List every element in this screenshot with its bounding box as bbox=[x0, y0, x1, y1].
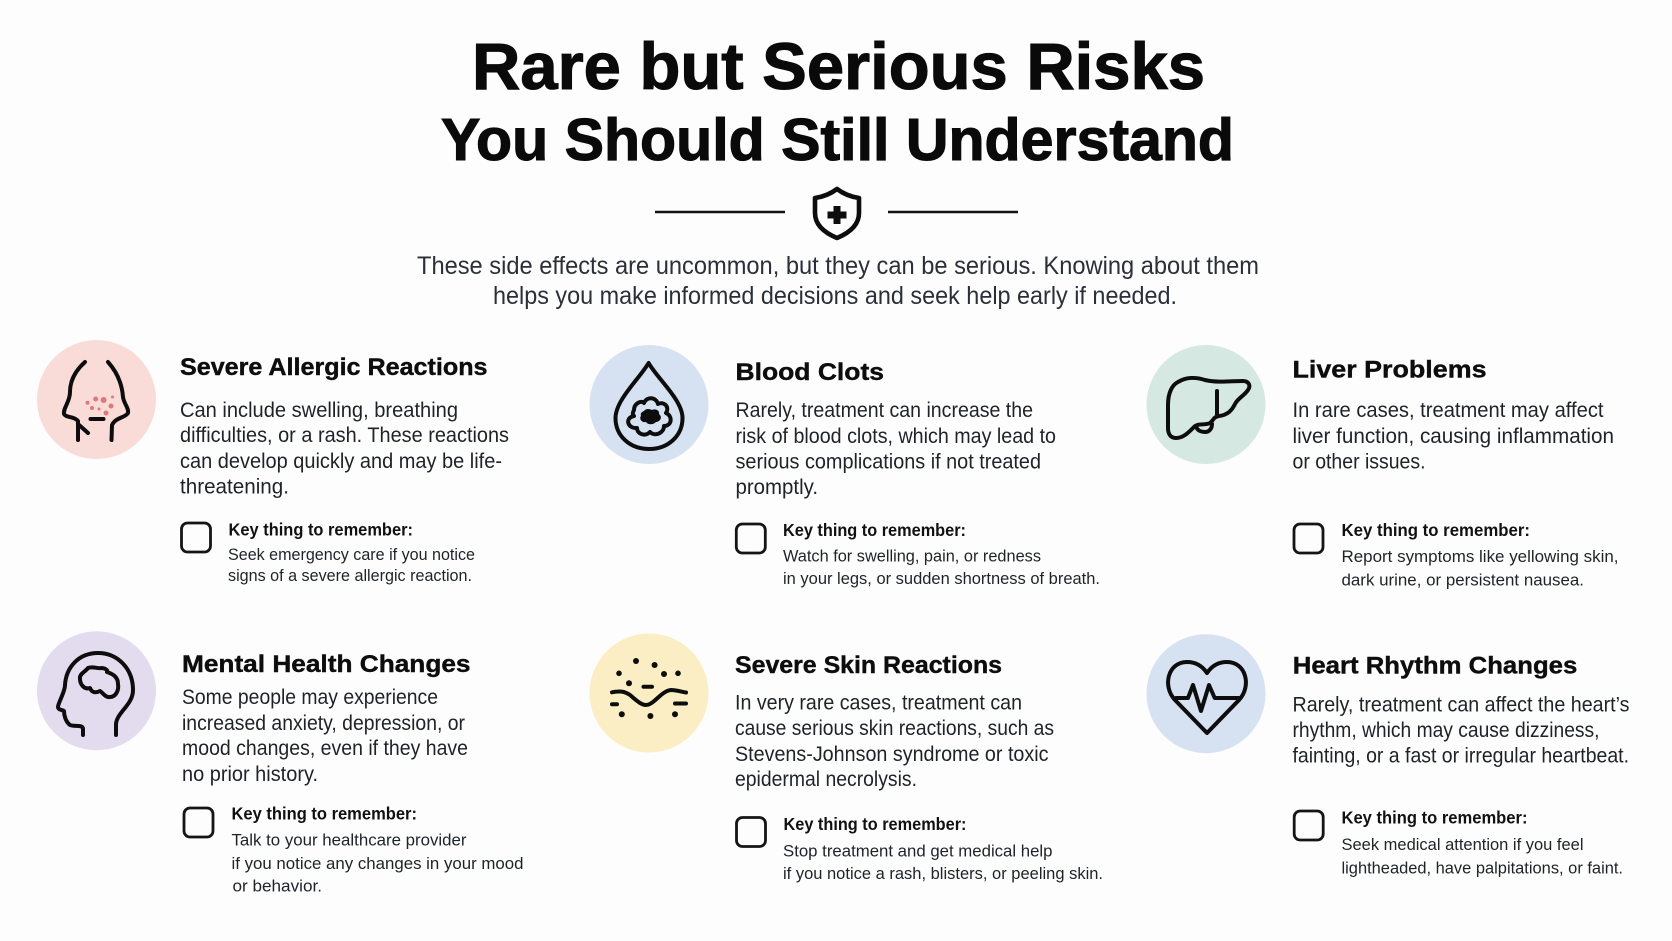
header bbox=[417, 29, 1259, 310]
icon: heart with pulse bbox=[1146, 634, 1266, 753]
key thing to remember: signs of a severe allergic reaction. bbox=[228, 566, 472, 585]
key thing to remember bbox=[1342, 520, 1618, 590]
description: can develop quickly and may be life- bbox=[180, 449, 502, 473]
icon: skin with particles bbox=[590, 634, 708, 752]
icon: liver bbox=[1146, 345, 1266, 464]
description: serious complications if not treated bbox=[736, 450, 1041, 474]
description: fainting, or a fast or irregular heartbeat. bbox=[1292, 744, 1629, 768]
checkbox bbox=[182, 523, 210, 552]
key thing to remember bbox=[232, 804, 524, 896]
key thing to remember bbox=[783, 814, 1103, 883]
key thing to remember: Key thing to remember: bbox=[1342, 520, 1530, 540]
key thing to remember: Key thing to remember: bbox=[1342, 808, 1528, 828]
intro text: helps you make informed decisions and seek help early if needed. bbox=[493, 282, 1177, 310]
key thing to remember: if you notice any changes in your mood bbox=[232, 854, 524, 873]
key thing to remember: Seek medical attention if you feel bbox=[1342, 835, 1584, 854]
key thing to remember: Talk to your healthcare provider bbox=[232, 830, 467, 850]
heading: Severe Allergic Reactions bbox=[180, 354, 488, 381]
description: mood changes, even if they have bbox=[182, 736, 468, 760]
panel: severe allergic reactions bbox=[37, 340, 509, 585]
checkbox bbox=[184, 808, 213, 837]
key thing to remember: Key thing to remember: bbox=[228, 520, 413, 540]
key thing to remember bbox=[228, 520, 475, 585]
key thing to remember: dark urine, or persistent nausea. bbox=[1342, 570, 1584, 590]
key thing to remember: Report symptoms like yellowing skin, bbox=[1342, 547, 1618, 566]
description: Rarely, treatment can increase the bbox=[736, 398, 1033, 422]
checkbox bbox=[736, 524, 765, 553]
description: In rare cases, treatment may affect bbox=[1292, 398, 1604, 422]
description: no prior history. bbox=[182, 762, 318, 786]
description: promptly. bbox=[736, 475, 818, 499]
description bbox=[1292, 692, 1630, 768]
description: increased anxiety, depression, or bbox=[182, 711, 465, 735]
heading: Mental Health Changes bbox=[182, 651, 470, 678]
description: rhythm, which may cause dizziness, bbox=[1292, 718, 1600, 742]
panel: severe skin reactions bbox=[590, 634, 1103, 883]
icon: shield with cross bbox=[815, 189, 859, 238]
description: risk of blood clots, which may lead to bbox=[736, 424, 1056, 448]
description: In very rare cases, treatment can bbox=[735, 690, 1022, 714]
description bbox=[735, 690, 1054, 791]
key thing to remember bbox=[1342, 808, 1623, 878]
description: Some people may experience bbox=[182, 685, 438, 709]
key thing to remember bbox=[783, 520, 1100, 588]
description bbox=[180, 398, 509, 498]
title: Rare but Serious Risks bbox=[472, 29, 1205, 103]
description: cause serious skin reactions, such as bbox=[735, 716, 1054, 740]
icon: face with rash bbox=[37, 340, 156, 459]
description bbox=[1292, 398, 1614, 474]
key thing to remember: or behavior. bbox=[232, 876, 322, 896]
key thing to remember: if you notice a rash, blisters, or peeling skin. bbox=[783, 864, 1103, 883]
description bbox=[736, 398, 1056, 499]
description: threatening. bbox=[180, 474, 289, 498]
intro text bbox=[417, 252, 1259, 310]
description: liver function, causing inflammation bbox=[1292, 424, 1614, 448]
description: epidermal necrolysis. bbox=[735, 767, 917, 791]
key thing to remember: in your legs, or sudden shortness of breath. bbox=[783, 569, 1100, 588]
intro text: These side effects are uncommon, but they can be serious. Knowing about them bbox=[417, 252, 1259, 280]
key thing to remember: Key thing to remember: bbox=[784, 814, 966, 834]
panel: mental health changes bbox=[37, 631, 524, 896]
key thing to remember: Stop treatment and get medical help bbox=[783, 842, 1052, 860]
heading: Severe Skin Reactions bbox=[735, 652, 1002, 679]
title bbox=[441, 29, 1234, 173]
key thing to remember: Key thing to remember: bbox=[783, 520, 966, 540]
icon: drop with clot bbox=[590, 345, 708, 464]
panel: blood clots bbox=[590, 345, 1100, 588]
description: Can include swelling, breathing bbox=[180, 398, 458, 422]
key thing to remember: Watch for swelling, pain, or redness bbox=[783, 546, 1041, 566]
key thing to remember: Key thing to remember: bbox=[232, 804, 417, 824]
description: Stevens-Johnson syndrome or toxic bbox=[735, 742, 1049, 766]
checkbox bbox=[736, 818, 766, 846]
description: Rarely, treatment can affect the heart’s bbox=[1292, 692, 1630, 716]
description: or other issues. bbox=[1292, 450, 1426, 474]
key thing to remember: lightheaded, have palpitations, or faint. bbox=[1342, 858, 1623, 878]
heading: Liver Problems bbox=[1292, 356, 1486, 384]
panel: heart rhythm changes bbox=[1146, 634, 1630, 878]
description bbox=[182, 685, 468, 786]
title: You Should Still Understand bbox=[441, 107, 1234, 173]
panel: liver problems bbox=[1146, 345, 1618, 590]
checkbox bbox=[1294, 811, 1323, 840]
heading: Heart Rhythm Changes bbox=[1293, 652, 1577, 680]
key thing to remember: Seek emergency care if you notice bbox=[228, 545, 475, 564]
checkbox bbox=[1294, 524, 1323, 553]
heading: Blood Clots bbox=[736, 359, 884, 386]
icon: head with brain bbox=[37, 631, 156, 750]
description: difficulties, or a rash. These reactions bbox=[180, 423, 509, 447]
